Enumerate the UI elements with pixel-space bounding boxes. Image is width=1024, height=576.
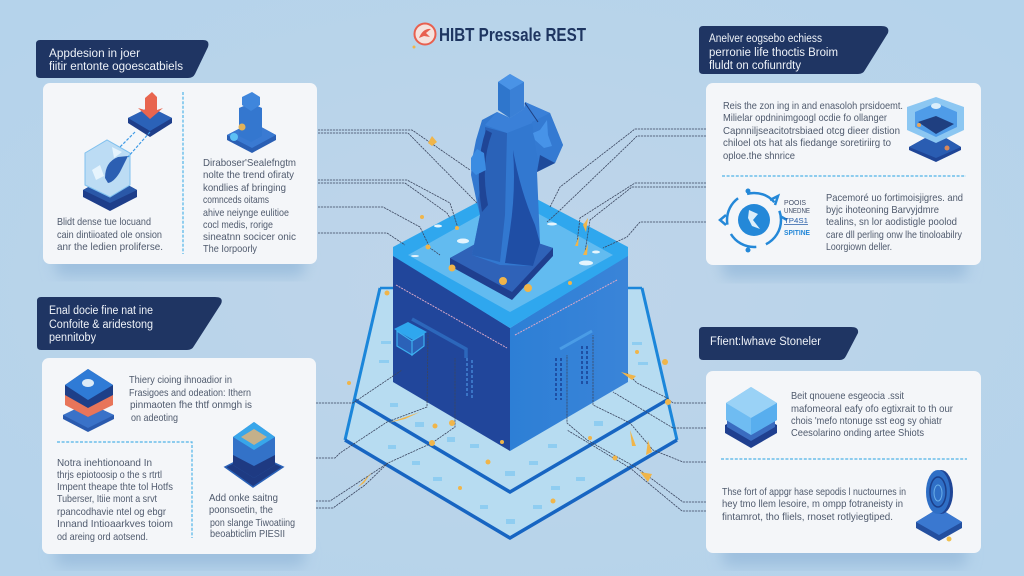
text block: right column: nolte the trend ofiraty — [203, 169, 295, 181]
text block: left: Notra inehtionoand In — [57, 457, 152, 469]
statue base — [450, 232, 553, 300]
statue head — [498, 74, 524, 118]
text block: left: thrjs epiotoosip o the s rtrtl — [57, 469, 162, 481]
side conduits and box — [394, 319, 592, 400]
section header: top left — [36, 40, 208, 78]
text block: right column: cocl medis, rorige — [203, 219, 273, 231]
small icon labels: TP4S1 — [784, 216, 808, 225]
text block: lower — [722, 486, 906, 523]
section header: top left: Appdesion in joer — [49, 48, 140, 60]
text block: upper: Capnniljseacitotrsbiaed otcg dieer distion — [723, 125, 900, 137]
text block: upper — [791, 390, 953, 439]
text block: right: Add onke saitng — [209, 492, 278, 504]
text block: top: on adeoting — [131, 412, 178, 424]
text block: lower: tealins, sn lor aodistigle poolod — [826, 216, 957, 228]
panel: bottom right — [706, 371, 981, 553]
title: HIBT Pressale REST — [439, 25, 586, 45]
text block: right column — [203, 157, 296, 255]
pedestal right face — [510, 255, 628, 451]
gold sparks — [347, 46, 671, 504]
text block: left — [57, 457, 173, 543]
text block: lower: hey tmo llem lesoire, m ompp fotraneisty in — [722, 498, 903, 510]
text block: left: Impent theape thte tol Hotfs — [57, 481, 173, 493]
pedestal — [393, 185, 628, 451]
section header: top left: fiitir entonte ogoescatbiels — [49, 61, 183, 73]
text block: top — [129, 374, 252, 424]
icon: globe with arrows — [720, 188, 787, 252]
shadow: top left panel — [55, 250, 305, 276]
text block: right column: sineatnn socicer onic — [203, 231, 296, 243]
text block: upper: Ceesolarino onding artee Shiots — [791, 427, 924, 439]
text block: top: Thiery cioing ihnoadior in — [129, 374, 232, 386]
text block: upper — [723, 100, 903, 162]
text block: upper: chiloel ots hat als fiedange soretiriirg to — [723, 137, 891, 149]
statue — [450, 74, 563, 300]
section header: top right: Anelver eogsebo echiess — [709, 33, 822, 45]
icon: stacked blocks — [225, 422, 283, 487]
pedestal top inner surface — [408, 198, 613, 312]
section header: bottom left — [37, 297, 222, 350]
text block: top: Frasigoes and odeation: Ithern — [129, 387, 251, 399]
text block: right column: kondlies af bringing — [203, 182, 286, 194]
text block: lower: Pacemoré uo fortimoisjigres. and — [826, 192, 963, 204]
section header: bottom left: Enal docie fine nat ine — [49, 305, 153, 317]
panel: top left — [43, 83, 317, 264]
text block: left column: Blidt dense tue locuand — [57, 216, 151, 228]
icon: blue tower — [227, 92, 276, 153]
text block: upper: oploe.the shnrice — [723, 150, 795, 162]
text block: lower: fintamrot, tho fliels, rnoset rotlyiegtiped. — [722, 511, 893, 523]
statue hand right — [533, 120, 552, 148]
text block: lower: Thse fort of appgr hase sepodis l nuctournes in — [722, 486, 906, 498]
small icon labels: SPITINE — [784, 228, 810, 237]
section header: bottom right: Ffient:lwhave Stoneler — [710, 336, 821, 348]
statue robe — [471, 102, 563, 266]
text block: lower: care dll perling onw lhe tinoloabilry — [826, 229, 963, 241]
icon: crystal stack — [907, 97, 964, 162]
shadow: top right panel — [722, 252, 967, 278]
icon: glass cube on base — [83, 132, 150, 211]
icon: water cube — [725, 387, 777, 448]
text block: right: beoabticlim PIESII — [210, 528, 285, 540]
water splashes — [411, 222, 600, 266]
text block: upper: Milielar opdninimgoogl ocdie fo ollanger — [723, 112, 887, 124]
title — [414, 24, 586, 45]
text block: left column: anr the ledien proliferse. — [57, 241, 163, 253]
small icon labels: POOIS — [784, 198, 806, 207]
small icon labels — [784, 198, 810, 237]
text block: upper: chois 'mefo ntonuge sst eog sy ohiatr — [791, 415, 942, 427]
text block: left: Tuberser, Itiie mont a srvt — [57, 493, 157, 505]
shadow: bottom right panel — [722, 541, 967, 566]
text block: lower: Loorgiown deller. — [826, 241, 892, 253]
section header: top right — [699, 26, 888, 74]
pedestal top rim — [393, 185, 628, 328]
text block: left: rpancodhavie ntel og ebgr — [57, 506, 166, 518]
text block: upper: mafomeoral eafy ofo egtixrait to th our — [791, 403, 953, 415]
text block: lower — [826, 192, 963, 253]
section header: bottom right — [699, 327, 858, 360]
small icon labels: UNEDNE — [784, 206, 810, 215]
text block: right column: The Iorpoorly — [203, 243, 258, 255]
text block: right column: Diraboser'Sealefngtm — [203, 157, 296, 169]
panel: bottom left — [42, 358, 316, 554]
text block: right: poonsoetin, the — [209, 504, 273, 516]
icon: red arrow on plate — [128, 92, 172, 137]
panel: top right — [706, 83, 981, 265]
text block: left: Innand Intioaarkves toiom — [57, 518, 173, 530]
shadow: bottom left panel — [55, 542, 305, 566]
icon: disc on plate — [916, 470, 962, 542]
text block: right column: comnceds oitams — [203, 194, 269, 206]
text block: lower: byjc ihoteoning Barvyjdmre — [826, 204, 939, 216]
text block: top: pinmaoten fhe thtf onmgh is — [130, 399, 252, 411]
text block: upper: Beit qnouene esgeocia .ssit — [791, 390, 904, 402]
text block: right: pon slange Tiwoatiing — [210, 517, 295, 529]
text block: left column: cain dintiioated ole onsion — [57, 229, 162, 241]
pedestal left face — [393, 255, 510, 451]
text block: upper: Reis the zon ing in and enasoloh prsidoemt. — [723, 100, 903, 112]
section header: top right: perronie life thoctis Broim — [709, 47, 838, 59]
central platform — [345, 288, 677, 538]
text block: left: od areing ord aotsend. — [57, 531, 148, 543]
text block: right column: ahive neiynge eulitioe — [203, 207, 289, 219]
section header: bottom left: pennitoby — [49, 332, 96, 344]
connector lines — [316, 129, 706, 511]
text block: left column — [57, 216, 163, 253]
statue hand left — [471, 149, 486, 175]
section header: bottom left: Confoite & aridestong — [49, 319, 153, 331]
icon: title logo — [414, 24, 436, 44]
section header: top right: fluldt on cofiunrdty — [709, 60, 801, 72]
icon: layered cube — [63, 369, 114, 432]
text block: right — [209, 492, 295, 540]
